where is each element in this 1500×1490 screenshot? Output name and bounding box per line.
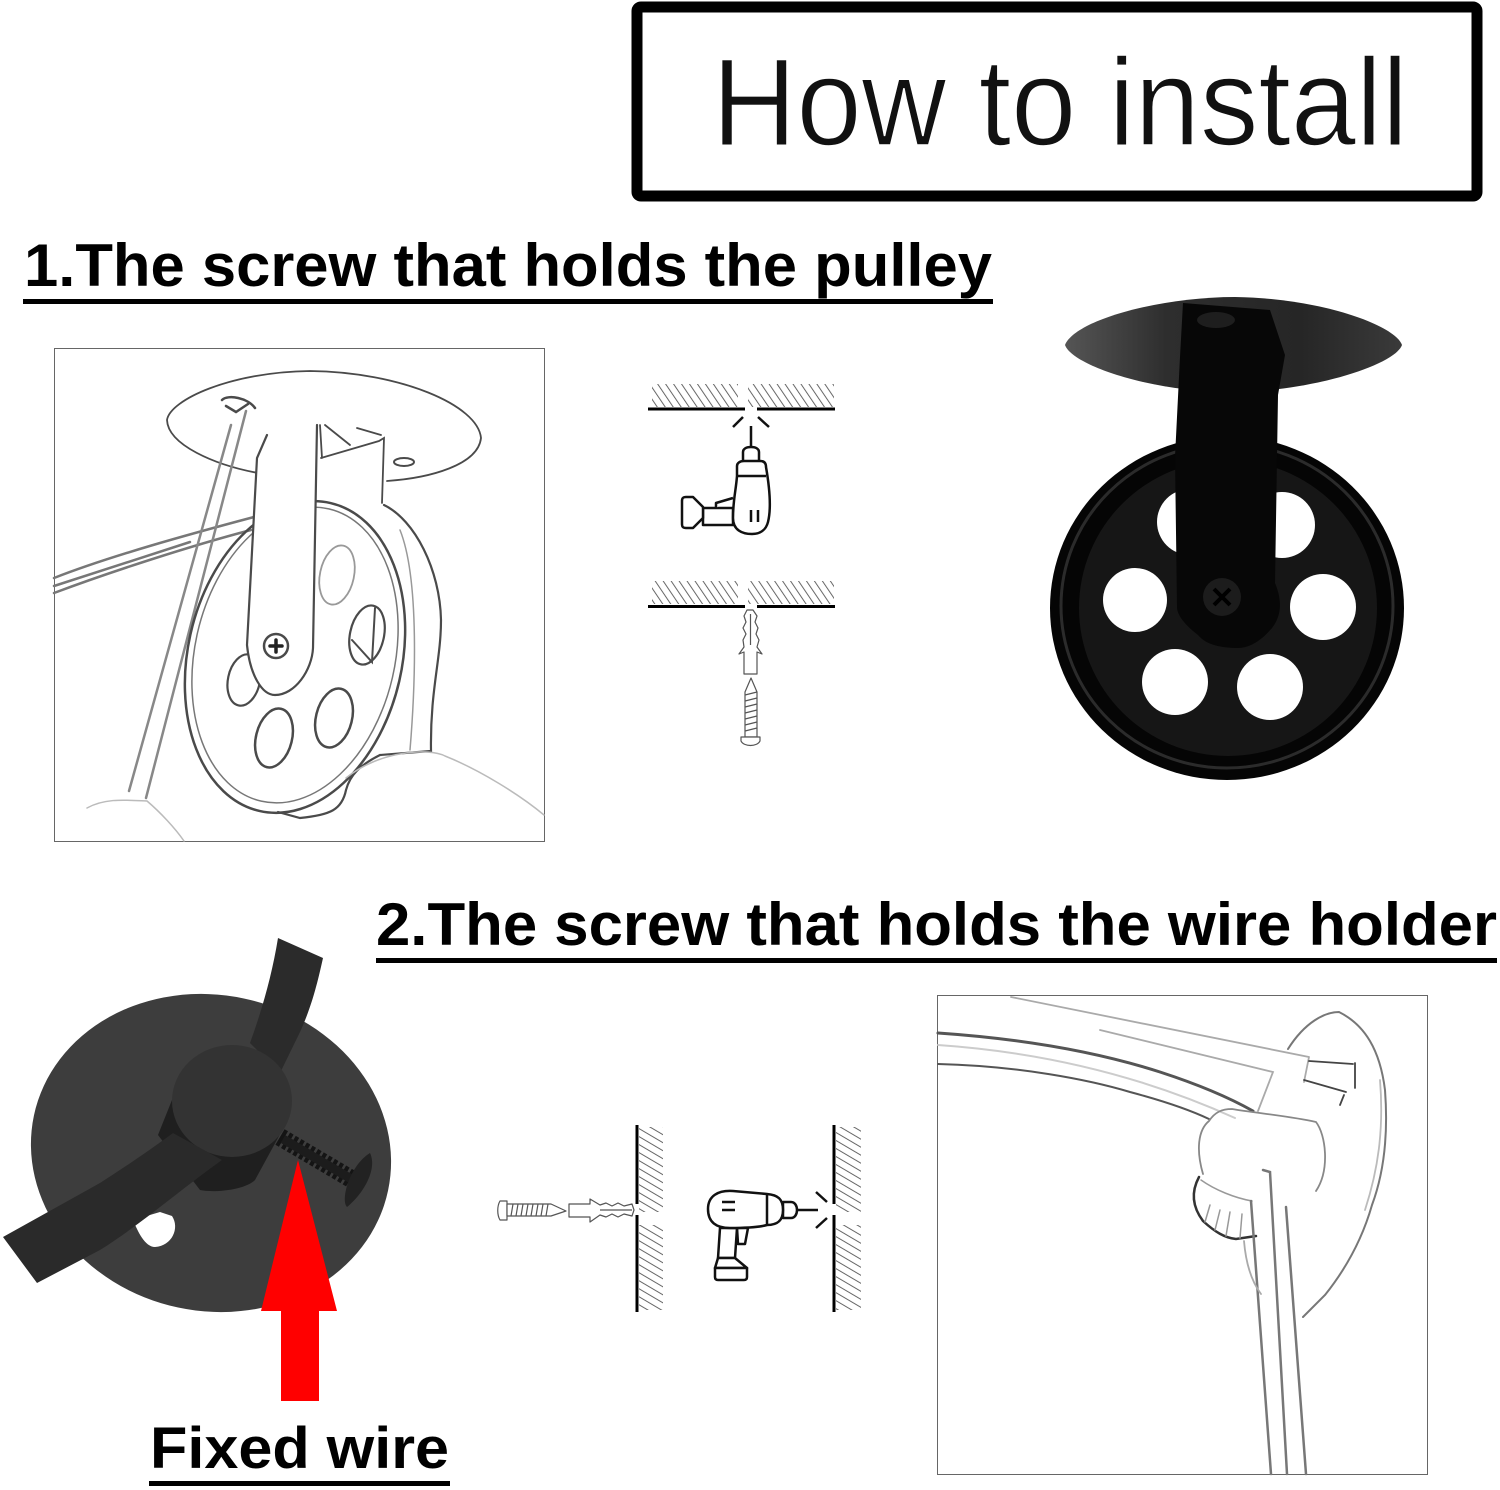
icon: drill into ceiling	[648, 384, 835, 534]
rod sketch	[1011, 997, 1309, 1111]
screwdriver tip sketch	[222, 397, 255, 412]
ceiling plate	[1065, 297, 1402, 392]
lower wire	[3, 1133, 222, 1283]
wire clamp top	[172, 1045, 292, 1157]
heading: step 2: 2.The screw that holds the wire holder	[376, 891, 1497, 958]
axle screw sketch	[264, 634, 288, 658]
threaded screw	[280, 1137, 353, 1180]
photo: black pulley with ceiling plate	[1050, 297, 1404, 780]
wire clamp side	[158, 1090, 285, 1191]
bracket	[1175, 303, 1285, 648]
label: Fixed wire: Fixed wire	[150, 1416, 449, 1481]
heading: step 1: 1.The screw that holds the pulley	[24, 232, 993, 299]
title box: How to install	[637, 7, 1477, 196]
round plate	[1, 961, 421, 1345]
wheel sketch	[155, 479, 435, 835]
screw head	[345, 1153, 372, 1207]
arrow: red arrow pointing to screw	[261, 1160, 337, 1401]
top screw	[1197, 312, 1235, 328]
wheel holes	[1103, 489, 1356, 720]
icon: anchor and screw into wall	[498, 1125, 663, 1312]
wheel disk	[1079, 460, 1377, 756]
photo: wire holder on round plate	[1, 938, 421, 1345]
plate hole	[133, 1212, 175, 1247]
icon: anchor and screw into ceiling	[648, 581, 835, 746]
plate hole sketch	[394, 458, 414, 466]
oval plate sketch	[1288, 1012, 1386, 1317]
clamp sketch	[1199, 1109, 1325, 1191]
lower wire sketch	[1251, 1170, 1306, 1474]
upper wire	[250, 938, 323, 1073]
ceiling plate sketch	[167, 371, 481, 481]
hand sketches	[87, 752, 544, 841]
knurled nut sketch	[1194, 1177, 1256, 1239]
bracket front sketch	[247, 425, 317, 695]
screwdriver sketch	[129, 411, 246, 798]
axle screw	[1203, 578, 1241, 616]
screw sketch	[1304, 1061, 1355, 1105]
wheel holes sketch	[314, 542, 360, 608]
icon: drill into wall	[708, 1125, 861, 1312]
panel: wire holder installation sketch	[938, 996, 1428, 1474]
panel: pulley installation sketch	[54, 348, 544, 842]
upper wire sketch	[938, 1033, 1253, 1111]
wire sketch	[54, 517, 254, 593]
back rim sketch	[278, 505, 441, 818]
title box: How to install: How to install	[712, 34, 1408, 172]
bracket back sketch	[320, 425, 384, 503]
wheel rim	[1050, 436, 1404, 780]
